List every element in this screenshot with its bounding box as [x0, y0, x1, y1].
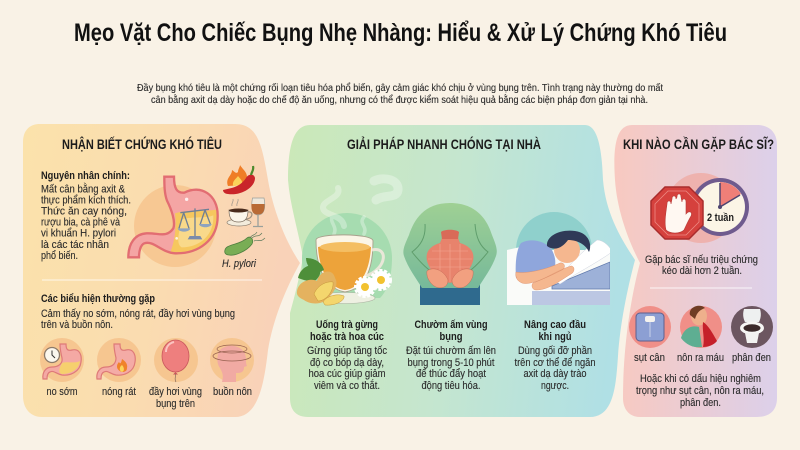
labels: symptom names: nóng rát	[102, 386, 136, 398]
icon: nausea head	[210, 338, 254, 382]
illustration: stop hand and two-week clock	[651, 173, 749, 243]
divider	[42, 280, 262, 281]
illustration: hot water bottle on belly	[403, 203, 497, 305]
text block: tea remedy: hoặc trà hoa cúc	[310, 331, 384, 343]
labels: symptom names: đầy hơi vùng	[149, 386, 202, 398]
icon: early fullness	[40, 338, 84, 382]
labels: warning signs: sụt cân	[634, 352, 665, 364]
illustration: ginger and chamomile tea	[297, 179, 398, 305]
labels: symptom names: buồn nôn	[213, 386, 252, 398]
icon: black stool toilet	[731, 306, 773, 348]
label: H. pylori: H. pylori	[222, 258, 257, 270]
text block: raise head remedy	[514, 319, 596, 392]
labels: warning signs: nôn ra máu	[677, 352, 724, 364]
steam	[323, 179, 398, 234]
panel: when to see a doctor	[614, 125, 777, 417]
panel: recognising indigestion	[23, 124, 300, 417]
text block: raise head remedy: Nâng cao đầu	[524, 319, 586, 331]
illustration: sleeping on wedge pillow	[507, 212, 612, 305]
intro text: cân bằng axit dạ dày hoặc do chế độ ăn uống, nhưng có thể được kiểm soát hiệu quả bằng các biện pháp đơn giản tại nhà.	[151, 93, 648, 106]
intro text	[137, 82, 663, 106]
text block: warm compress remedy	[406, 319, 496, 392]
text block: common symptoms: Các biểu hiện thường gặp	[41, 293, 155, 305]
text block: tea remedy: hoa cúc giúp giảm	[308, 368, 386, 380]
labels: symptom names: no sớm	[46, 386, 78, 398]
text block: raise head remedy: ngược.	[541, 380, 569, 392]
text block: common symptoms	[41, 293, 235, 331]
labels: symptom names	[46, 386, 252, 410]
text block: main causes: Thức ăn cay nóng,	[41, 206, 127, 218]
icon: bloating balloon	[154, 338, 198, 382]
text block: raise head remedy: Dùng gối đỡ phần	[518, 345, 592, 357]
text block: see doctor after two weeks: Gặp bác sĩ nếu triệu chứng	[645, 254, 758, 266]
text block: tea remedy: Gừng giúp tăng tốc	[307, 345, 388, 357]
icon: wine glass	[251, 198, 265, 226]
icon: coffee cup	[227, 199, 252, 226]
text block: main causes: vi khuẩn H. pylori	[41, 228, 116, 240]
text block: warm compress remedy: Đặt túi chườm ấm lên	[406, 345, 496, 357]
text block: main causes: phổ biến.	[41, 250, 78, 262]
heading: recognising: NHẬN BIẾT CHỨNG KHÓ TIÊU	[62, 137, 222, 152]
text block: raise head remedy: khi ngủ	[538, 331, 572, 343]
text block: warm compress remedy: bụng	[440, 331, 462, 343]
icon: bacterium	[225, 232, 265, 255]
labels: warning signs: phân đen	[732, 352, 771, 364]
text block: warm compress remedy: để thúc đẩy hoạt	[416, 368, 486, 380]
text block: tea remedy: độ co bóp dạ dày,	[310, 357, 384, 369]
text block: warm compress remedy: Chườm ấm vùng	[414, 319, 488, 331]
text block: serious warning signs: phân đen.	[680, 397, 721, 409]
icon: stop sign	[651, 187, 703, 239]
text block: main causes: Nguyên nhân chính:	[41, 170, 130, 182]
icon: chili and flame	[223, 165, 255, 194]
text block: tea remedy: Uống trà gừng	[316, 319, 378, 331]
intro text: Đầy bụng khó tiêu là một chứng rối loạn tiêu hóa phổ biến, gây cảm giác khó chịu ở vùng bụng trên. Tình trạng này thường do mất	[137, 82, 663, 94]
text block: main causes	[41, 170, 131, 262]
text block: see doctor after two weeks	[645, 254, 758, 277]
panel: quick home remedies	[288, 125, 635, 417]
text block: main causes: Mất cân bằng axit &	[41, 182, 126, 196]
text block: raise head remedy: axit dạ dày trào	[524, 368, 586, 380]
icon: heartburn	[97, 338, 141, 382]
text block: raise head remedy: trên cơ thể để ngăn	[514, 357, 596, 369]
text block: serious warning signs: Hoặc khi có dấu hiệu nghiêm	[640, 373, 761, 385]
text block: serious warning signs	[636, 373, 764, 409]
divider	[650, 288, 752, 289]
text block: see doctor after two weeks: kéo dài hơn 2 tuần.	[662, 265, 742, 277]
heading: doctor: KHI NÀO CẦN GẶP BÁC SĨ?	[623, 137, 774, 152]
text block: warm compress remedy: bụng trong 5-10 phút	[408, 357, 494, 369]
text block: serious warning signs: trọng như sụt cân, nôn ra máu,	[636, 385, 764, 397]
text block: tea remedy: viêm và co thắt.	[314, 379, 380, 392]
text block: common symptoms: trên và buồn nôn.	[41, 319, 113, 331]
text block: main causes: thực phẩm kích thích.	[41, 194, 131, 206]
illustration: stomach with balance scale	[128, 177, 222, 267]
heading: remedies: GIẢI PHÁP NHANH CHÓNG TẠI NHÀ	[347, 137, 541, 152]
labels: symptom names: bụng trên	[156, 398, 195, 410]
text block: common symptoms: Cảm thấy no sớm, nóng rát, đầy hơi vùng bụng	[41, 308, 235, 320]
text block: warm compress remedy: động tiêu hóa.	[422, 380, 480, 392]
icon: vomiting blood	[680, 306, 722, 348]
text block: tea remedy	[307, 319, 388, 392]
label: 2 weeks: 2 tuần	[707, 212, 734, 224]
icon: weighing scale	[629, 306, 671, 348]
labels: warning signs	[634, 352, 771, 364]
text block: main causes: rượu bia, cà phê và	[41, 216, 120, 228]
text block: main causes: là các tác nhân	[41, 239, 109, 251]
